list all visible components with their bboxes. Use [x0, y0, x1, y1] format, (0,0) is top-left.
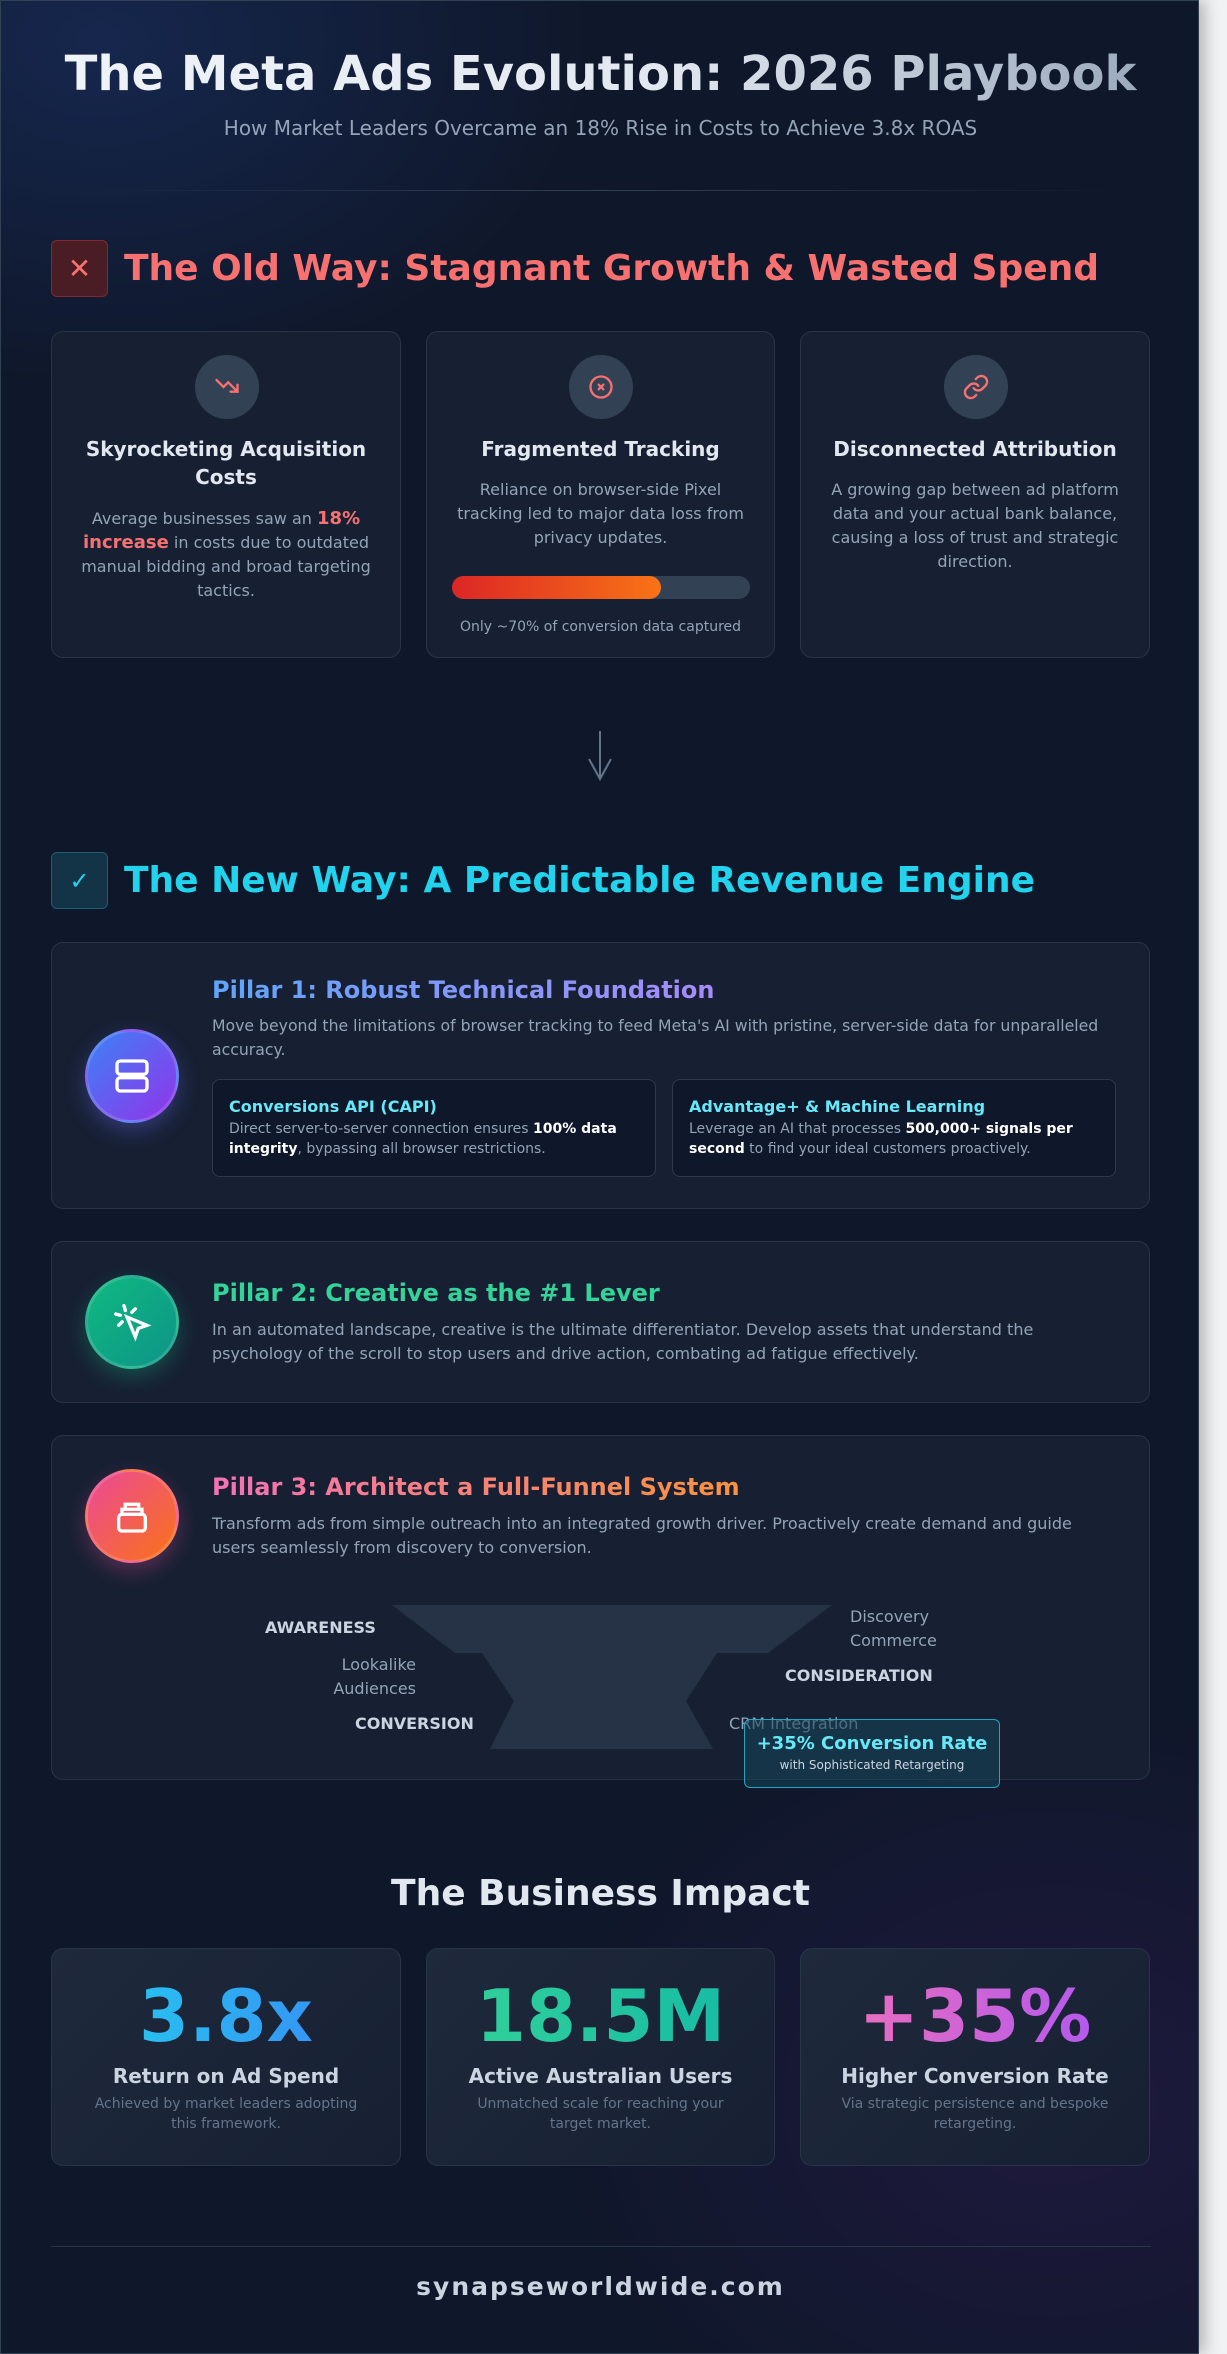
panel: acquisition costs: Skyrocketing Acquisition Costs: [86, 437, 366, 489]
panel: disconnected attribution: Disconnected Attribution: [833, 437, 1117, 461]
old way heading: [51, 240, 1099, 297]
callout: +35%: +35% Conversion Rate: [757, 1733, 987, 1754]
panel: fragmented tracking: Fragmented Tracking: [481, 437, 720, 461]
progress bar: [452, 576, 750, 599]
stat: conversion: +35%: [859, 1974, 1091, 2058]
icon: trend down: [195, 355, 259, 419]
panel: pillar 1: Pillar 1: Robust Technical Foundation: [212, 976, 714, 1004]
stat: conversion: [800, 1948, 1150, 2166]
panel: pillar 1: [51, 942, 1150, 1209]
panel: fragmented tracking: [426, 331, 775, 658]
callout: +35%: with Sophisticated Retargeting: [780, 1758, 964, 1772]
stat: ROAS: 3.8x: [139, 1974, 313, 2058]
icon: cursor click: [85, 1275, 179, 1369]
stat: ROAS: Achieved by market leaders adopting this framework.: [95, 2096, 357, 2132]
stat: ROAS: Return on Ad Spend: [113, 2064, 339, 2088]
panel: fragmented tracking: Only ~70% of conversion data captured: [460, 619, 741, 635]
sub-card: Advantage+: Leverage an AI that processes 500,000+ signals per second to find your ideal customers proactively.: [689, 1121, 1073, 1157]
stat: ROAS: [51, 1948, 401, 2166]
sub-card: CAPI: Conversions API (CAPI): [229, 1097, 437, 1116]
new way heading: [51, 852, 1035, 909]
icon: layers: [85, 1469, 179, 1563]
funnel chart: Commerce: [850, 1631, 937, 1650]
icon: server: [85, 1029, 179, 1123]
panel: disconnected attribution: [800, 331, 1150, 658]
panel: pillar 1: Move beyond the limitations of browser tracking to feed Meta's AI with pristine, server-side data for unparalleled accuracy.: [212, 1016, 1098, 1059]
arrow: down: [588, 731, 612, 781]
title: The Meta Ads Evolution: 2026 Playbook: [65, 46, 1136, 102]
footer: synapseworldwide.com: [416, 2272, 785, 2301]
stat: conversion: Higher Conversion Rate: [841, 2064, 1109, 2088]
panel: acquisition costs: Average businesses saw an 18% increase in costs due to outdated manual bidding and broad targeting tactics.: [81, 508, 371, 600]
panel: acquisition costs: [51, 331, 401, 658]
panel: fragmented tracking: Reliance on browser-side Pixel tracking led to major data loss from privacy updates.: [457, 480, 744, 547]
sub-card: Advantage+: [672, 1079, 1116, 1177]
heading: business impact: The Business Impact: [391, 1873, 810, 1914]
icon: x circle: [569, 355, 633, 419]
callout: +35%: [744, 1719, 1000, 1788]
stat: users: 18.5M: [476, 1974, 725, 2058]
funnel chart: CRM Integration: [729, 1714, 858, 1733]
panel: disconnected attribution: A growing gap between ad platform data and your actual bank balance, causing a loss of trust and strategic direction.: [831, 480, 1119, 571]
stat: users: Unmatched scale for reaching your target market.: [477, 2096, 724, 2132]
panel: pillar 3: Transform ads from simple outreach into an integrated growth driver. Proactively create demand and guide users seamlessly from discovery to conversion.: [212, 1514, 1072, 1557]
panel: pillar 3: Pillar 3: Architect a Full-Funnel System: [212, 1473, 740, 1501]
subtitle: How Market Leaders Overcame an 18% Rise in Costs to Achieve 3.8x ROAS: [224, 116, 977, 140]
icon: link: [944, 355, 1008, 419]
icon: x box: ✕: [68, 252, 91, 285]
sub-card: CAPI: Direct server-to-server connection ensures 100% data integrity, bypassing all browser restrictions.: [229, 1121, 617, 1157]
stat: users: [426, 1948, 775, 2166]
funnel chart: [265, 1605, 1000, 1788]
funnel chart: CONSIDERATION: [785, 1666, 933, 1685]
panel: pillar 3: [51, 1435, 1150, 1780]
sub-card: CAPI: [212, 1079, 656, 1177]
funnel chart: Audiences: [333, 1679, 416, 1698]
funnel chart: CONVERSION: [355, 1714, 474, 1733]
panel: pillar 2: In an automated landscape, creative is the ultimate differentiator. Develop assets that understand the psychology of the scroll to stop users and drive action, combating ad fatigue effectively.: [212, 1320, 1033, 1363]
sub-card: Advantage+: Advantage+ & Machine Learning: [689, 1097, 985, 1116]
icon: check box: ✓: [69, 866, 90, 894]
funnel chart: Lookalike: [342, 1655, 416, 1674]
heading text: The New Way: A Predictable Revenue Engine: [124, 860, 1035, 901]
stat: users: Active Australian Users: [469, 2064, 732, 2088]
panel: pillar 2: Pillar 2: Creative as the #1 Lever: [212, 1279, 660, 1307]
icon: check box: [51, 852, 108, 909]
panel: pillar 2: [51, 1241, 1150, 1403]
heading text: The Old Way: Stagnant Growth & Wasted Spend: [124, 248, 1099, 289]
funnel chart: Discovery: [850, 1607, 929, 1626]
icon: x box: [51, 240, 108, 297]
stat: conversion: Via strategic persistence and bespoke retargeting.: [841, 2096, 1109, 2132]
funnel chart: AWARENESS: [265, 1618, 376, 1637]
